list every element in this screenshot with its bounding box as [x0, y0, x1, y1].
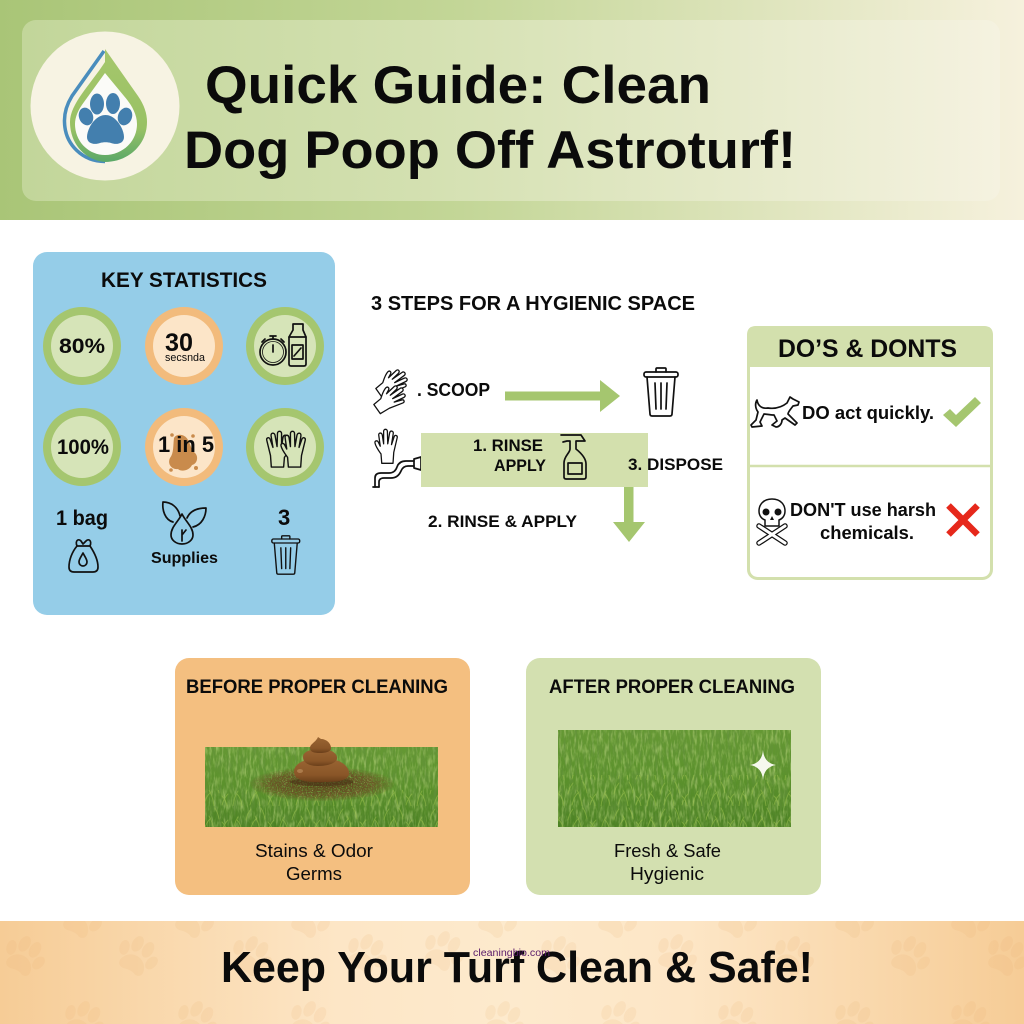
text: don't use harsh chemicals: DON'T use harsh: [790, 500, 936, 520]
label: 1 rinse apply: APPLY: [494, 456, 547, 475]
stat: 1 in 5 with stain: 1 in 5: [158, 432, 214, 457]
heading: do's and don'ts: DO’S & DONTS: [778, 335, 957, 363]
text: don't use harsh chemicals: [790, 500, 936, 543]
icon: leaf drop supplies: [151, 502, 218, 567]
heading: before: BEFORE PROPER CLEANING: [186, 676, 448, 698]
stat: 3 bins: 3: [278, 505, 290, 530]
text: don't use harsh chemicals: chemicals.: [820, 523, 914, 543]
icon: glove and hose: [373, 429, 421, 487]
icon: stopwatch and bottle: [246, 307, 324, 385]
footer banner: [0, 921, 1024, 1024]
stat: 100%: 100%: [57, 436, 109, 459]
icon: water drop paw logo: [30, 32, 180, 180]
panel: key statistics: [33, 252, 335, 615]
label: scoop: . SCOOP: [417, 380, 490, 400]
stat: 30 seconds: secsnda: [165, 352, 206, 364]
panel: do's and don'ts: [747, 326, 993, 578]
icon: sparkle: [750, 750, 776, 780]
title: Quick Guide: Clean: [205, 56, 711, 115]
watermark: cleaningbio.com: cleaningbio.com: [473, 948, 550, 959]
caption: after: Fresh & Safe: [614, 841, 721, 861]
icon: gloves: [370, 364, 412, 417]
icon: trash bin: [644, 368, 678, 416]
icon: poop pile: [294, 737, 349, 782]
stat: 1 bag: [56, 507, 108, 572]
stat: 3 bins: [272, 505, 300, 574]
stat: 1 in 5 with stain: [145, 408, 223, 486]
stat: 30 seconds: 30: [165, 329, 193, 357]
icon: running dog: [751, 397, 799, 427]
title: Dog Poop Off Astroturf!: [184, 121, 796, 180]
label: supplies: Supplies: [151, 550, 218, 567]
header banner: [0, 0, 1024, 220]
heading: after: AFTER PROPER CLEANING: [549, 676, 795, 698]
icon: skull and crossbones: [759, 499, 785, 543]
image: dirty turf: [205, 737, 438, 827]
icon: check mark: [943, 397, 981, 427]
label: 1 rinse apply: [473, 436, 547, 475]
image: clean turf: [558, 730, 791, 827]
label: 1 rinse apply: 1. RINSE: [473, 436, 543, 455]
label: 2 rinse and apply: 2. RINSE & APPLY: [428, 512, 578, 531]
stat: 1 bag: 1 bag: [56, 507, 108, 530]
panel: before cleaning: [175, 658, 470, 895]
label: 3 dispose: 3. DISPOSE: [628, 455, 723, 474]
title: [184, 56, 796, 180]
heading: key statistics: KEY STATISTICS: [101, 269, 267, 292]
text: do act quickly: DO act quickly.: [802, 403, 934, 423]
panel: after cleaning: [526, 658, 821, 895]
caption: before: Stains & Odor: [255, 841, 373, 861]
icon: red cross: [948, 506, 978, 534]
caption: before: [255, 841, 373, 884]
caption: after: [614, 841, 721, 884]
panel: rinse band: [421, 433, 648, 487]
steps section: [370, 293, 723, 542]
caption: before: Germs: [286, 864, 342, 884]
stat: 30 seconds: [145, 307, 223, 385]
caption: after: Hygienic: [630, 864, 704, 884]
arrow: down: [613, 487, 645, 542]
footer slogan: Keep Your Turf Clean & Safe!: [221, 943, 813, 992]
icon: gloves in circle: [246, 408, 324, 486]
heading: 3 steps: 3 STEPS FOR A HYGIENIC SPACE: [371, 293, 695, 315]
stat: 100%: [43, 408, 121, 486]
arrow: right: [505, 380, 620, 412]
stat: 80%: 80%: [59, 335, 105, 358]
icon: spray bottle: [561, 435, 586, 479]
stat: 80%: [43, 307, 121, 385]
